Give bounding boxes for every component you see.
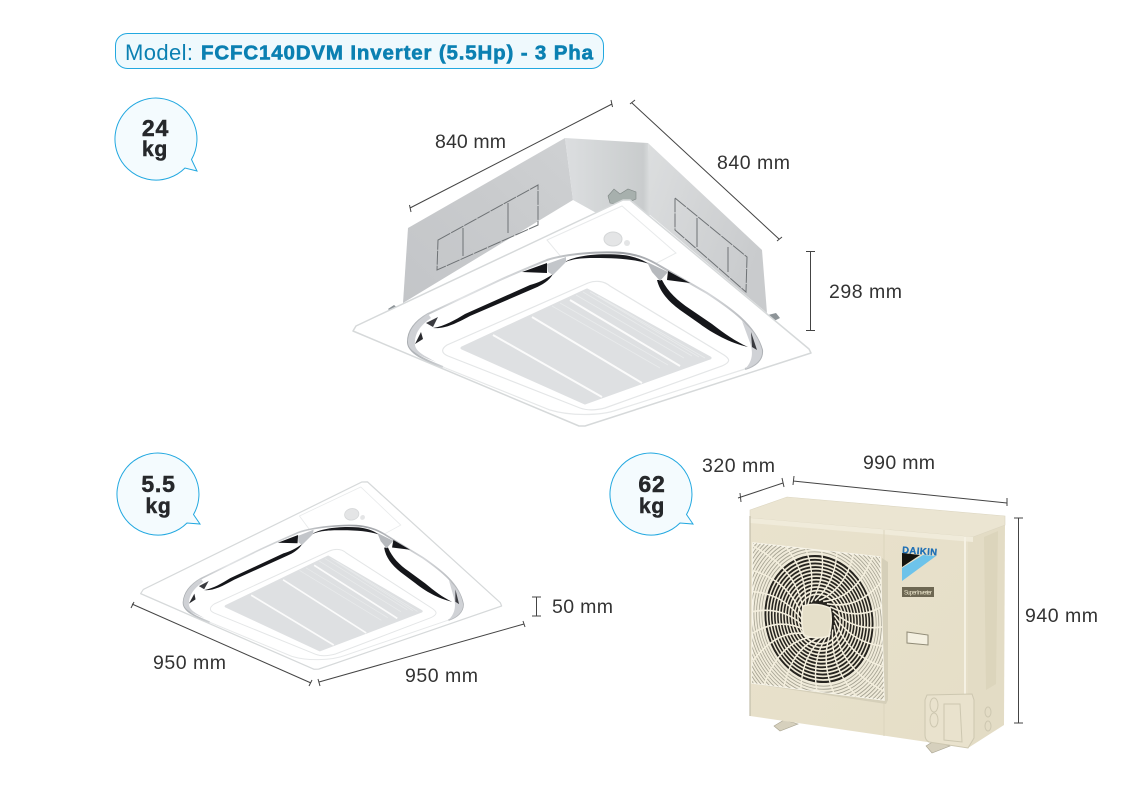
dimension: panel height 50 mm: 50 mm xyxy=(552,596,613,618)
Super Inverter badge: Super Inverter xyxy=(904,590,932,596)
dimension: top right 840 mm: 840 mm xyxy=(717,152,790,174)
weight badge: panel 5.5 kg: kg xyxy=(145,495,172,518)
weight badge: outdoor unit 62 kg: 62 xyxy=(638,471,666,497)
outdoor unit xyxy=(722,497,1005,753)
title: model name pill: FCFC140DVM Inverter (5.5Hp) - 3 Pha xyxy=(201,42,594,64)
Daikin logo: DAIKIN xyxy=(902,545,938,558)
dimension: panel 950 mm right xyxy=(318,621,525,687)
indoor cassette unit with ceiling box xyxy=(353,138,811,426)
Super Inverter badge xyxy=(902,587,934,597)
dimension: height 298 mm xyxy=(806,252,902,331)
weight badge: indoor unit 24 kg: kg xyxy=(142,138,168,161)
service cover xyxy=(925,694,991,748)
dimension: top left 840 mm: 840 mm xyxy=(435,131,506,153)
dimension: panel 950 mm left: 950 mm xyxy=(153,652,226,674)
weight badge: panel 5.5 kg xyxy=(117,453,200,535)
weight badge: indoor unit 24 kg xyxy=(115,98,197,180)
weight badge: indoor unit 24 kg: 24 xyxy=(142,115,169,141)
dimension: top right 840 mm xyxy=(630,100,790,241)
title: model name pill: Model: xyxy=(125,40,193,65)
fan guard xyxy=(751,542,888,704)
weight badge: panel 5.5 kg: 5.5 xyxy=(141,471,176,497)
dimension: height 298 mm: 298 mm xyxy=(829,281,902,303)
dimension: outdoor width 990 mm: 990 mm xyxy=(863,452,935,474)
title: model name pill xyxy=(116,34,604,68)
dimension: outdoor height 940 mm: 940 mm xyxy=(1025,605,1098,627)
Daikin logo xyxy=(902,545,938,581)
ceiling panel face xyxy=(135,480,511,672)
dimension: outdoor depth 320 mm: 320 mm xyxy=(702,455,775,477)
dimension: outdoor width 990 mm xyxy=(793,452,1007,506)
unit feet xyxy=(774,720,950,753)
weight badge: outdoor unit 62 kg xyxy=(610,453,693,535)
weight badge: outdoor unit 62 kg: kg xyxy=(639,495,665,518)
dimension: panel 950 mm left xyxy=(131,602,312,686)
dimension: outdoor height 940 mm xyxy=(1014,518,1098,723)
dimension: panel 950 mm right: 950 mm xyxy=(405,665,478,687)
handle xyxy=(907,632,928,645)
dimension: top left 840 mm xyxy=(410,100,612,212)
dimension: outdoor depth 320 mm xyxy=(702,455,784,502)
